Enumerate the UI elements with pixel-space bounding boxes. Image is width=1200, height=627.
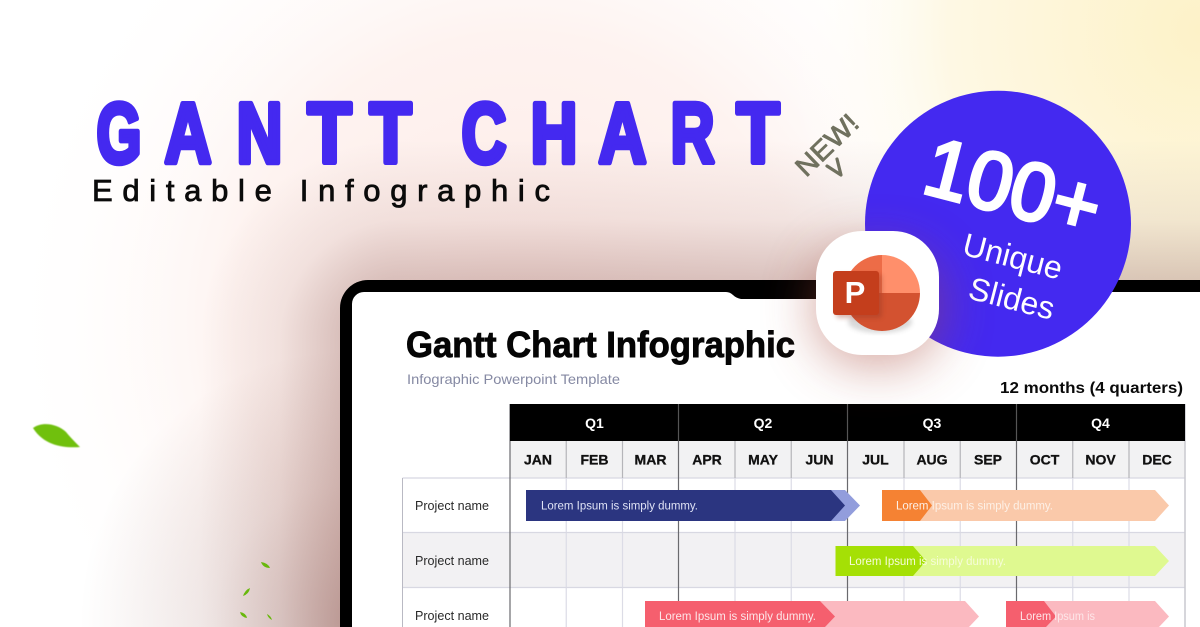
month header: JUL <box>862 452 889 468</box>
duration label: 12 months (4 quarters) <box>1000 380 1183 397</box>
device frame <box>340 280 1200 627</box>
month header: DEC <box>1142 452 1172 468</box>
icon: powerpoint <box>816 231 939 355</box>
bar: blue <box>526 490 860 521</box>
month header: NOV <box>1085 452 1116 468</box>
month header: MAR <box>635 452 666 468</box>
project names: Project name <box>415 498 489 513</box>
icon: large leaf <box>33 424 80 447</box>
title: A <box>598 86 646 182</box>
bar: orange: Lorem Ipsum is simply dummy. <box>896 500 1053 512</box>
title: A <box>164 86 212 182</box>
icon: powerpoint: P <box>845 275 865 310</box>
bar: pink 1: Lorem Ipsum is simply dummy. <box>659 611 816 623</box>
project names: Project name <box>415 553 489 568</box>
quarter header: Q4 <box>1091 415 1110 431</box>
month header: FEB <box>580 452 608 468</box>
slide subheading: Infographic Powerpoint Template <box>407 371 620 387</box>
month header <box>524 454 1172 465</box>
subtitle: Editable Infographic <box>92 173 550 208</box>
icon shadow <box>815 250 940 365</box>
quarter header: Q1 <box>585 415 604 431</box>
title <box>96 86 780 182</box>
title: T <box>736 86 780 182</box>
screen <box>352 292 1200 627</box>
title: T <box>370 86 412 182</box>
bar: blue: Lorem Ipsum is simply dummy. <box>541 500 698 512</box>
bar: pink 2 <box>1006 601 1169 627</box>
row backgrounds <box>402 441 1185 588</box>
quarter header <box>510 404 1185 441</box>
month header: APR <box>692 452 722 468</box>
badge label: Slides <box>965 270 1058 327</box>
grid lines <box>402 404 1185 627</box>
device shadow <box>80 140 1200 627</box>
gantt chart <box>402 404 1185 627</box>
month header: AUG <box>916 452 948 468</box>
quarter header: Q3 <box>923 415 942 431</box>
month header: MAY <box>748 452 779 468</box>
bar: pink 2: Lorem Ipsum is <box>1020 611 1095 623</box>
bar: pink 1 <box>645 601 979 627</box>
badge: 100+ unique slides <box>865 91 1131 357</box>
badge label: Unique <box>959 226 1066 286</box>
slide content <box>402 324 1185 627</box>
leaves <box>33 424 272 620</box>
new label: NEW! <box>789 108 865 182</box>
badge label <box>959 226 1066 327</box>
month header: JUN <box>805 452 834 468</box>
month header: OCT <box>1030 452 1060 468</box>
project names: Project name <box>415 608 489 623</box>
quarter header: Q2 <box>754 415 773 431</box>
title: N <box>236 86 282 182</box>
slide heading: Gantt Chart Infographic <box>406 324 795 365</box>
title: C <box>462 86 506 182</box>
title: H <box>530 86 578 182</box>
month header: JAN <box>524 452 552 468</box>
month header: SEP <box>974 452 1002 468</box>
badge number: 100+ <box>915 121 1110 254</box>
bar: green: Lorem Ipsum is simply dummy. <box>849 556 1006 568</box>
bar: green <box>836 546 1169 576</box>
icon: small arrow <box>827 159 841 175</box>
project names <box>415 498 489 623</box>
icon: small leaves <box>240 562 272 620</box>
title: T <box>308 86 352 182</box>
bar: orange <box>882 490 1169 521</box>
title: G <box>96 86 142 182</box>
title: R <box>670 86 714 182</box>
